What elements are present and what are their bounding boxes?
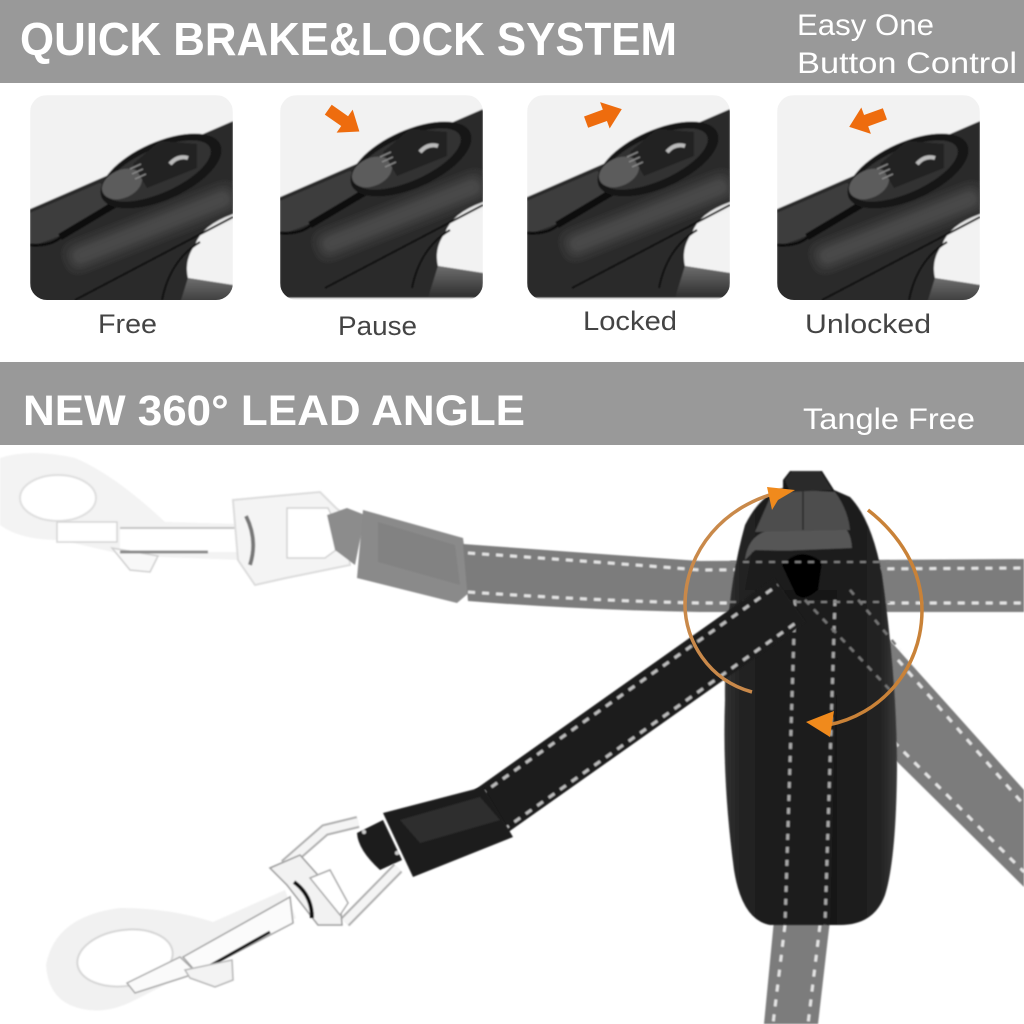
black collar (357, 787, 513, 877)
swivel ring (270, 822, 398, 925)
faded swivel (233, 492, 350, 585)
rotation arrows (685, 487, 922, 737)
panel: locked (527, 95, 730, 300)
panel: pause (280, 95, 483, 300)
subtitle: tangle free: Tangle Free (803, 403, 975, 436)
faded strap: horizontal (463, 544, 1024, 612)
faded hook (0, 453, 244, 572)
faded strap: vertical bottom (764, 920, 830, 1024)
mode labels (98, 306, 931, 341)
snap hook (46, 890, 296, 1010)
subtitle: easy one button control: Easy One (797, 9, 934, 42)
header band: quick brake and lock system (0, 0, 1024, 83)
icon: orange arrow down-right (320, 98, 367, 143)
black leash strap (480, 585, 800, 830)
icon: orange arrow down-left (844, 101, 890, 140)
panel: free (30, 95, 233, 310)
mode labels: Pause (338, 311, 417, 341)
subtitle: easy one button control: Button Control (797, 47, 1017, 80)
header band: new 360 lead angle (0, 362, 1024, 445)
panel: unlocked (777, 95, 980, 310)
strap across handle (775, 600, 838, 925)
subtitle: easy one button control (797, 9, 1017, 80)
title: new 360 lead angle: NEW 360° LEAD ANGLE (23, 387, 525, 435)
handle top cap (745, 528, 852, 560)
bottom hook and swivel (46, 787, 513, 1010)
faded strap: diagonal right (870, 635, 1024, 887)
retractable handle case (724, 471, 900, 925)
title: quick brake and lock: QUICK BRAKE&LOCK SYSTEM (20, 13, 677, 65)
faded leash: horizontal position with clip (0, 453, 1024, 1024)
mode labels: Free (98, 309, 157, 339)
icon: orange arrow up-right (581, 96, 627, 135)
mode labels: Locked (583, 306, 677, 336)
mode labels: Unlocked (805, 309, 931, 339)
faded collar (327, 508, 470, 603)
